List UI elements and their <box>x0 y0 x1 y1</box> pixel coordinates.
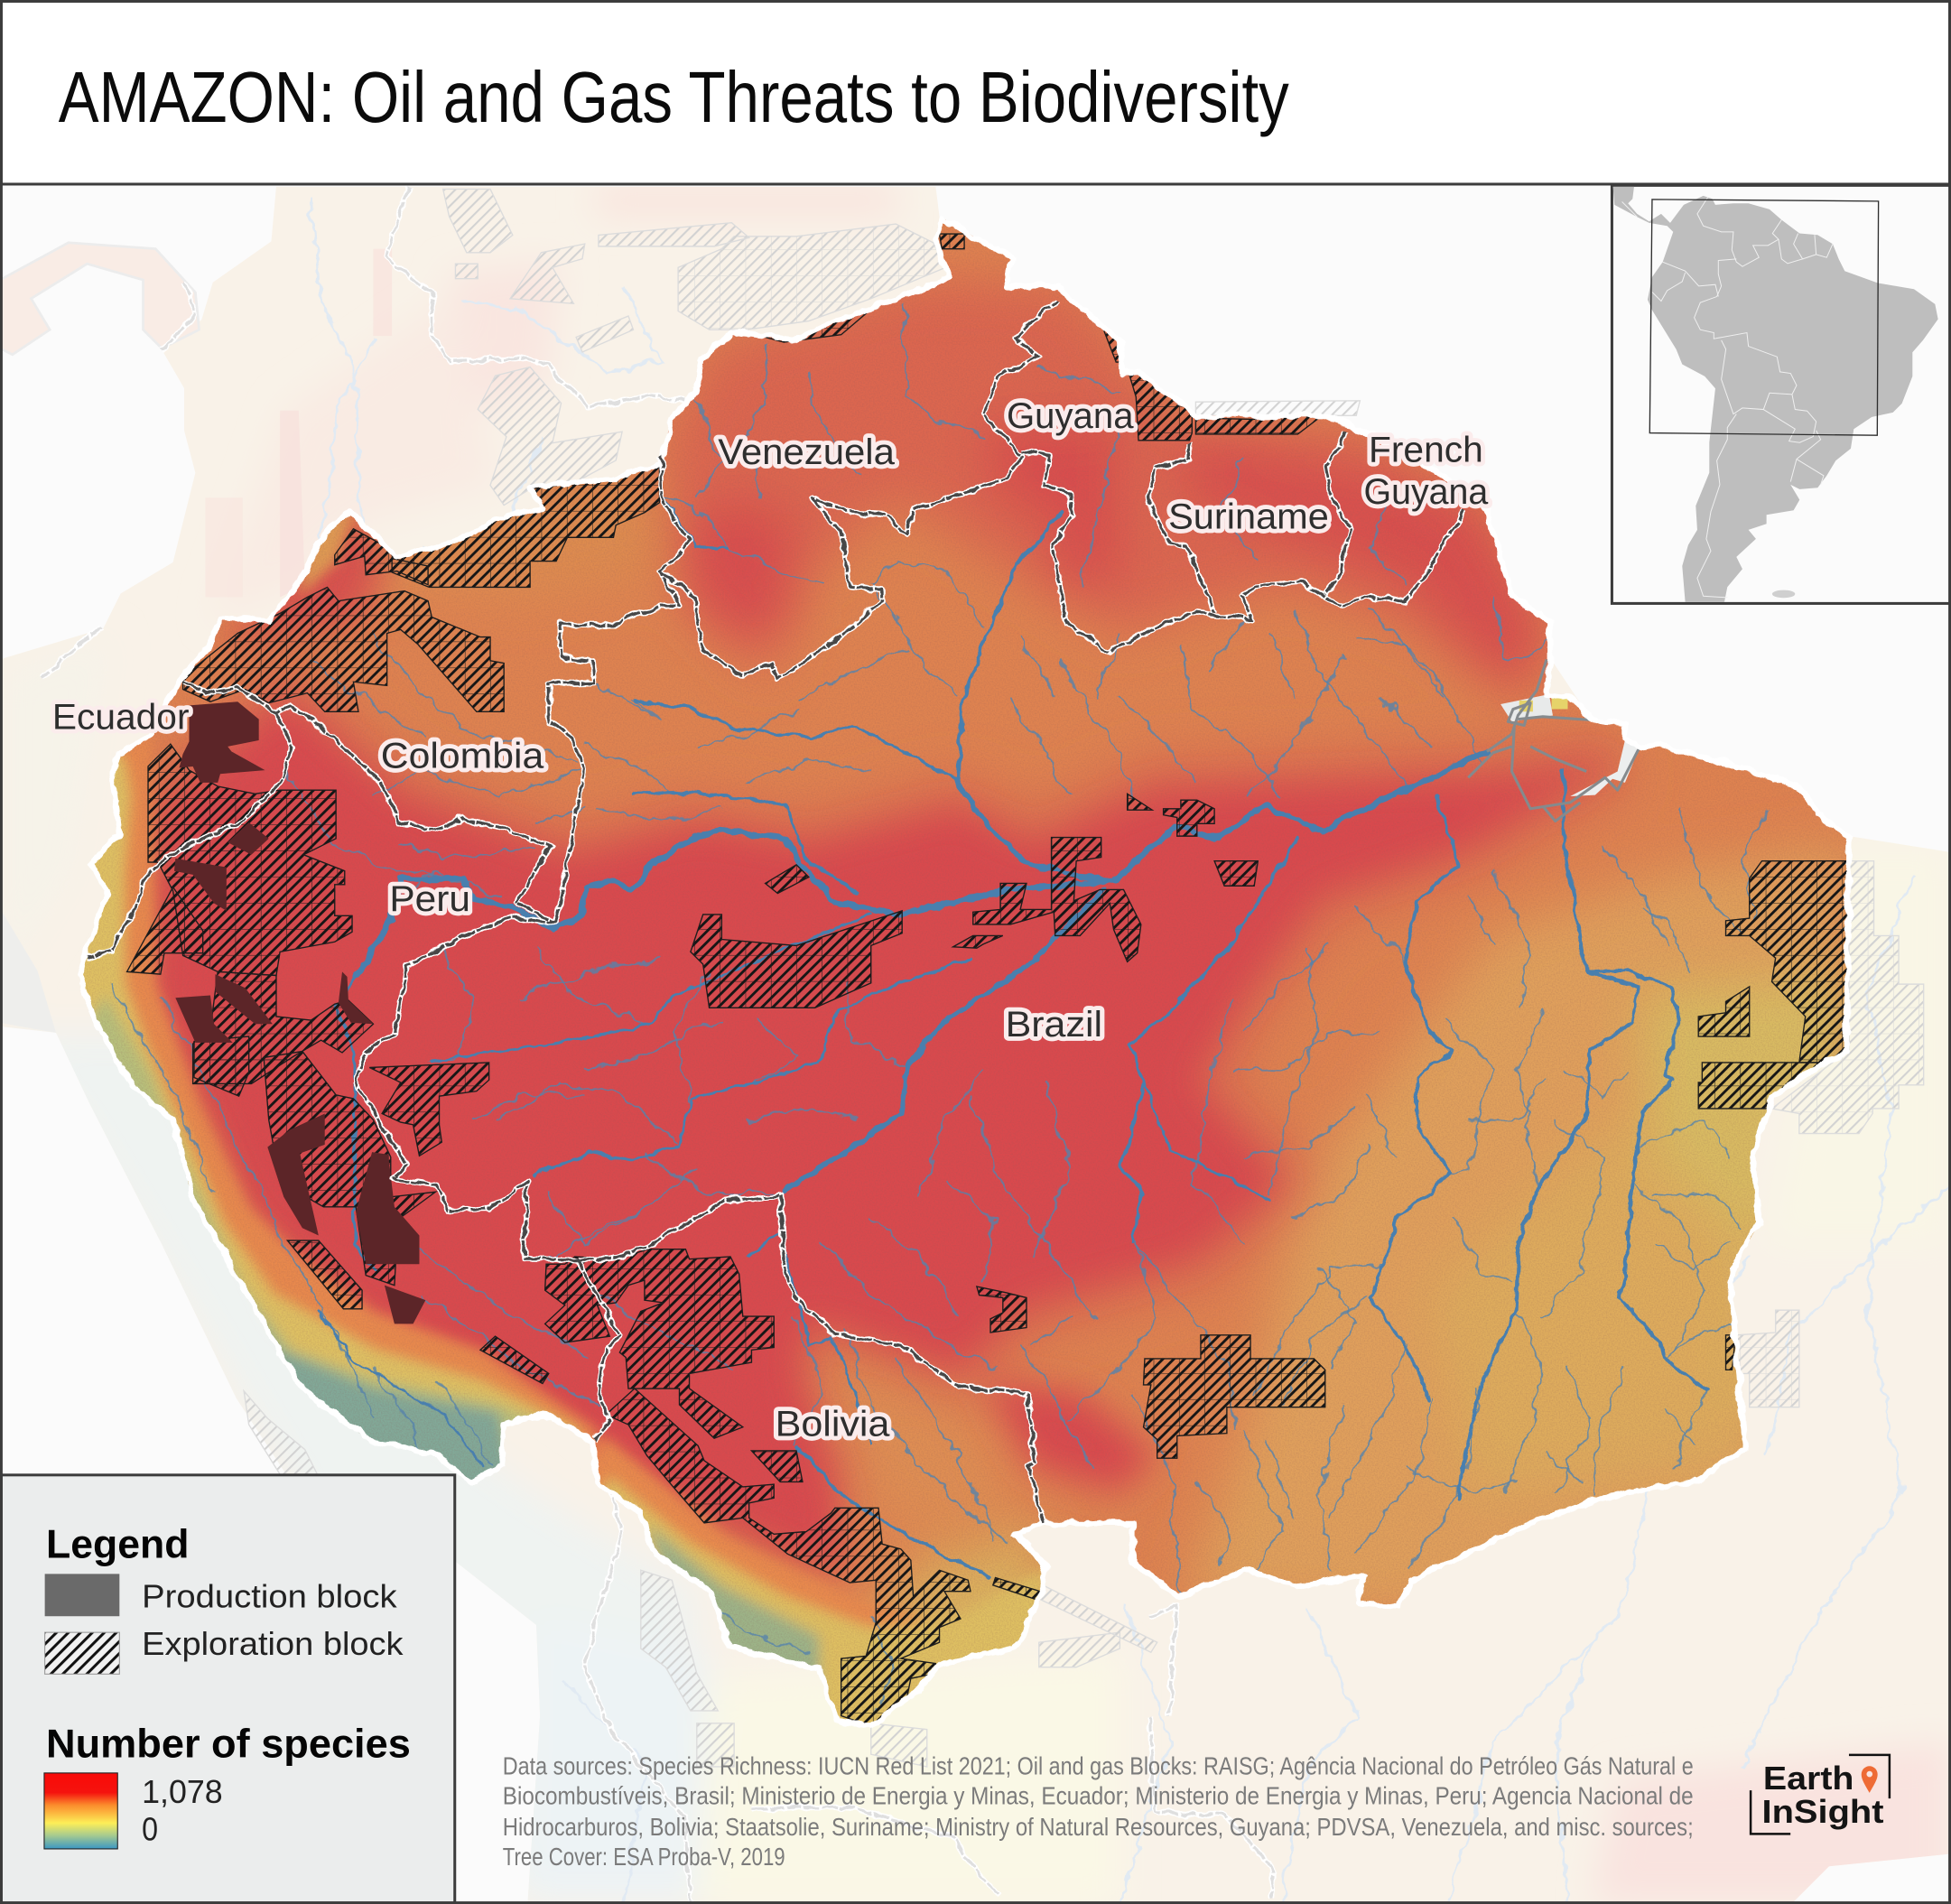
label: French Guyana: French <box>1369 430 1483 469</box>
production blocks <box>174 701 425 1324</box>
label: Suriname: Suriname <box>1168 497 1329 537</box>
inset: Falkland Islands <box>1772 590 1795 598</box>
title: AMAZON: Oil and Gas Threats to Biodiversity <box>59 57 1289 137</box>
label: Ecuador: Ecuador <box>52 698 190 738</box>
inset: country borders <box>1622 198 1833 598</box>
faint Panama and Central America land <box>0 243 200 355</box>
swatch: exploration block <box>45 1632 119 1674</box>
legend heading: Legend <box>46 1522 190 1566</box>
Earth InSight logo <box>1751 1755 1890 1834</box>
label: Guyana: Guyana <box>1007 396 1134 436</box>
faint rivers on land <box>311 200 1951 1904</box>
legend text: exploration block: Exploration block <box>142 1626 404 1662</box>
label: Brazil: Brazil <box>1006 1005 1102 1045</box>
legend text: production block: Production block <box>142 1579 397 1615</box>
speckled terrain texture <box>50 200 1879 1754</box>
country labels <box>52 396 1489 1444</box>
Amazon biome outline <box>79 218 1849 1726</box>
data sources note: Hidrocarburos, Bolivia; Staatsolie, Suriname; Ministry of Natural Resources, Guyana; PDVSA, Venezuela, and misc. sources; <box>503 1813 1694 1841</box>
inset locator map of South America <box>1612 185 1950 603</box>
inset: continent <box>1613 187 1938 602</box>
icon: location pin <box>1862 1766 1878 1793</box>
faint country borders outside the Amazon <box>43 187 1272 1904</box>
label: French Guyana: Guyana <box>1363 472 1489 512</box>
label: Bolivia: Bolivia <box>776 1404 890 1444</box>
title bar <box>1 1 1950 184</box>
species richness map of the Amazon biome <box>50 200 1879 1754</box>
legend heading: number of species: Number of species <box>46 1723 411 1767</box>
label: Colombia: Colombia <box>381 736 544 776</box>
color ramp: species richness <box>44 1773 117 1849</box>
data sources note: Biocombustíveis, Brasil; Ministerio de Energia y Minas, Ecuador; Ministerio de Energia y Minas, Peru; Agencia Nacional de <box>503 1781 1694 1809</box>
faint exploration blocks outside the Amazon <box>244 189 1924 1767</box>
legend panel <box>1 1475 455 1903</box>
Earth InSight logo: Earth <box>1763 1760 1853 1797</box>
Earth InSight logo: InSight <box>1761 1794 1884 1830</box>
exploration blocks inside the Amazon <box>127 234 1849 1726</box>
data sources note <box>503 1751 1694 1871</box>
label: French Guyana <box>1363 430 1489 512</box>
river network <box>112 305 1767 1717</box>
inset: study area frame <box>1649 200 1879 435</box>
label: Peru: Peru <box>389 879 470 919</box>
country borders inside the Amazon <box>87 300 1464 1523</box>
ramp minimum value: 0 <box>142 1811 158 1847</box>
ramp maximum value: 1,078 <box>142 1774 223 1810</box>
swatch: production block <box>45 1574 119 1616</box>
label: Venezuela: Venezuela <box>718 432 896 472</box>
data sources note: Tree Cover: ESA Proba-V, 2019 <box>503 1843 785 1871</box>
Amazon mouth delta <box>1468 659 1640 822</box>
data sources note: Data sources: Species Richness: IUCN Red List 2021; Oil and gas Blocks: RAISG; Agência Nacional do Petróleo Gás Natural e <box>503 1751 1694 1779</box>
